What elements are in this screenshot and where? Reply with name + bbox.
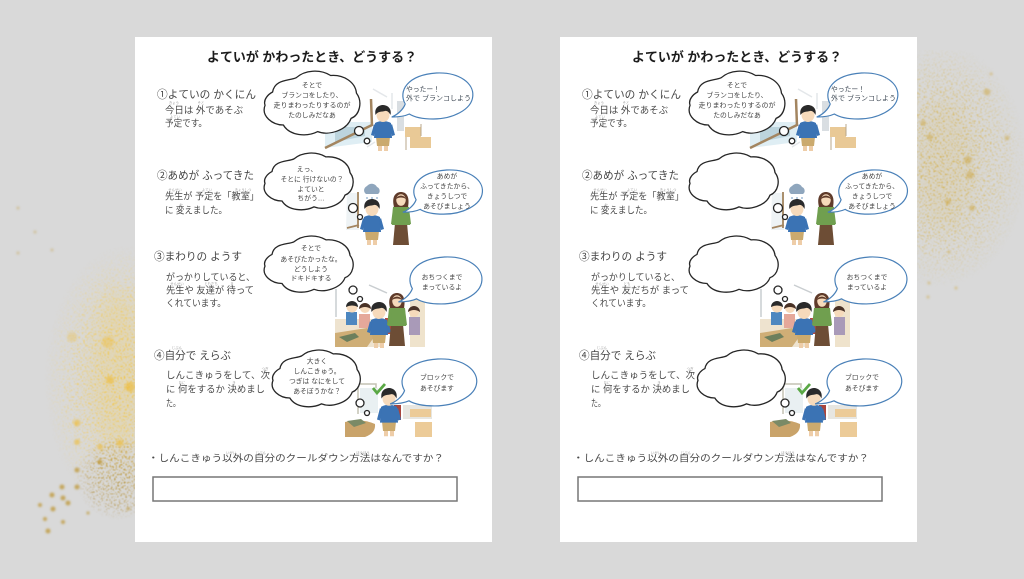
step 3 speech bubble: おちつくまで (847, 274, 888, 282)
step 2 speech bubble: あそびましょう (423, 202, 471, 210)
step 1 thought bubble (264, 71, 370, 144)
step 3 text: とも (624, 281, 630, 286)
step 2 text: せんせい (168, 187, 182, 192)
question: ほうほう (356, 450, 370, 455)
step 2 text: きょうしつ (660, 187, 677, 192)
step 2 text: ②あめが ふってきた (582, 168, 679, 182)
step 3 text: がっかりしていると、 (166, 272, 255, 284)
step 2 text: 先生が 予定を「教室」 (590, 190, 684, 202)
step 4 text: き (657, 380, 661, 385)
step 4 text: に 何をするか 決めまし (166, 384, 265, 396)
step 3 text: くれています。 (166, 298, 226, 310)
step 3 blank thought bubble (689, 236, 788, 302)
step 2 text: よてい (202, 187, 213, 192)
step 1 thought bubble: ブランコをしたり、 (282, 90, 342, 100)
step 2 text: きょうしつ (235, 187, 252, 192)
step 3 speech bubble: まっているよ (422, 284, 462, 292)
step 4 text (579, 345, 695, 410)
step 4 speech bubble (390, 359, 477, 406)
step 4 speech bubble: ブロックで (845, 372, 879, 382)
step 4 thought bubble: あそぼうかな？ (293, 388, 341, 396)
step 1 text: ①よていの かくにん (157, 88, 256, 101)
answer box (153, 477, 457, 501)
question: いがい (226, 450, 237, 455)
step 2 text (582, 168, 684, 216)
step 4 thought bubble: つぎは なにをして (289, 376, 345, 386)
step 3 text (154, 250, 255, 310)
step 2 blank thought bubble (689, 153, 788, 220)
step 4 speech bubble: あそびます (420, 384, 454, 392)
step 2 text: に 変えました。 (590, 204, 652, 216)
step 1 speech bubble (392, 73, 473, 119)
step 1 thought bubble (689, 71, 795, 144)
step 2 thought bubble: えっ、 (297, 166, 317, 174)
step 3 speech bubble: まっているよ (847, 284, 887, 292)
step 2 text: せんせい (593, 187, 607, 192)
page background (560, 37, 917, 542)
step 3 thought bubble: ドキドキする (291, 274, 331, 282)
step 1 speech bubble: やったー！ (406, 86, 440, 94)
step 2 speech bubble: あそびましょう (848, 202, 896, 210)
step 1 text: 今日は 外であそぶ (165, 104, 243, 116)
question: ・しんこきゅう以外の自分のクールダウン方法はなんですか？ (573, 452, 869, 464)
step 2 speech bubble: ふってきたから、 (845, 182, 899, 190)
step 2 speech bubble: あめが (862, 172, 882, 180)
step 1 illustration (750, 89, 856, 151)
step 3 thought bubble: あそびたかったな。 (280, 256, 342, 264)
step 3 text: 先生や 友達が 待って (166, 284, 254, 296)
step 3 text: 先生や 友だちが まって (591, 284, 689, 296)
step 1 text: そと (198, 100, 204, 105)
step 2 text: か (604, 202, 608, 207)
step 4 thought bubble: しんこきゅう。 (293, 368, 341, 376)
step 3 thought bubble (264, 236, 362, 302)
step 3 text: がっかりしていると、 (591, 272, 680, 284)
question: ・しんこきゅう以外の自分のクールダウン方法はなんですか？ (148, 452, 444, 464)
title: よていが かわったとき、どうする？ (632, 50, 842, 64)
step 1 text (582, 88, 681, 130)
step 2 thought bubble: ちがう… (297, 194, 325, 202)
step 3 illustration (760, 285, 850, 348)
question: いがい (651, 450, 662, 455)
step 3 text: ま (230, 281, 234, 286)
step 3 speech bubble (398, 257, 482, 304)
step 4 blank thought bubble (697, 350, 794, 416)
step 2 text: よてい (627, 187, 638, 192)
question (148, 450, 444, 464)
question (573, 450, 869, 464)
gold splatter: right (917, 50, 1024, 310)
step 1 text: ①よていの かくにん (582, 88, 681, 101)
step 4 text: た。 (591, 398, 605, 410)
step 4 speech bubble: ブロックで (420, 372, 454, 382)
step 3 speech bubble (823, 257, 907, 304)
question: じぶん (681, 450, 692, 455)
gold splatter: left (0, 200, 144, 550)
step 4 thought bubble: 大きく (307, 356, 327, 366)
step 2 text: か (179, 202, 183, 207)
step 4 text: ④自分で えらぶ (154, 349, 231, 362)
question: ほうほう (781, 450, 795, 455)
worksheet: right (blank thoughts) (560, 37, 917, 542)
step 4 text: き (232, 380, 236, 385)
step 4 speech bubble: あそびます (845, 384, 879, 392)
step 4 speech bubble (815, 359, 902, 406)
step 4 text: しんこきゅうをして、次 (591, 370, 695, 382)
step 3 illustration (335, 285, 425, 348)
step 1 text: 予定です。 (165, 118, 207, 130)
step 1 text: 今日は 外であそぶ (590, 104, 668, 116)
step 1 thought bubble: そとで (302, 82, 322, 90)
step 2 thought bubble (264, 153, 362, 220)
step 4 text: つぎ (262, 366, 269, 371)
step 4 thought bubble (272, 350, 370, 416)
step 1 text: きょう (169, 100, 179, 105)
step 1 text: 予定です。 (590, 118, 632, 130)
step 4 text: なに (179, 380, 186, 385)
step 2 speech bubble: あめが (437, 172, 457, 180)
step 3 speech bubble: おちつくまで (422, 274, 463, 282)
step 2 text: ②あめが ふってきた (157, 168, 254, 182)
step 3 text (579, 250, 689, 310)
step 2 speech bubble (403, 170, 482, 214)
step 1 thought bubble: たのしみだなあ (713, 112, 761, 120)
step 2 speech bubble: きょうしつで (427, 192, 467, 200)
step 1 speech bubble: やったー！ (831, 86, 865, 94)
step 4 text: じぶん (172, 345, 183, 350)
step 2 text: に 変えました。 (165, 204, 227, 216)
step 2 illustration (771, 184, 836, 245)
step 2 thought bubble: そとに 行けないの？ (280, 174, 344, 184)
step 1 thought bubble: そとで (727, 82, 747, 90)
step 4 illustration (770, 384, 857, 437)
step 3 text: ともだち (204, 281, 218, 286)
step 2 thought bubble: よていと (297, 186, 325, 194)
step 4 text: た。 (166, 398, 180, 410)
step 4 text: ④自分で えらぶ (579, 349, 656, 362)
step 1 speech bubble: 外で ブランコしよう (831, 94, 896, 102)
step 1 text (157, 88, 256, 130)
answer box (578, 477, 882, 501)
step 2 text (157, 168, 259, 216)
step 1 speech bubble: 外で ブランコしよう (406, 94, 471, 102)
step 4 text: じぶん (597, 345, 608, 350)
worksheet: left (with example thoughts) (135, 37, 492, 542)
step 1 speech bubble (817, 73, 898, 119)
step 1 text: よてい (170, 114, 181, 119)
step 4 text: つぎ (687, 366, 694, 371)
step 3 text: くれています。 (591, 298, 651, 310)
step 2 speech bubble (828, 170, 907, 214)
step 3 text: せんせい (170, 281, 184, 286)
step 4 text: しんこきゅうをして、次 (166, 370, 270, 382)
step 3 text: せんせい (595, 281, 609, 286)
step 3 text: ③まわりの ようす (154, 250, 242, 263)
step 4 text: に 何をするか 決めまし (591, 384, 690, 396)
title: よていが かわったとき、どうする？ (207, 50, 417, 64)
step 1 thought bubble: 走りまわったりするのが (698, 100, 776, 110)
step 1 thought bubble: ブランコをしたり、 (707, 90, 767, 100)
page background (135, 37, 492, 542)
step 2 speech bubble: ふってきたから、 (420, 182, 474, 190)
step 2 speech bubble: きょうしつで (852, 192, 892, 200)
step 2 text: 先生が 予定を「教室」 (165, 190, 259, 202)
step 1 thought bubble: 走りまわったりするのが (274, 100, 351, 110)
step 1 text: きょう (594, 100, 604, 105)
question: じぶん (256, 450, 267, 455)
step 1 illustration (325, 89, 431, 151)
step 3 thought bubble: そとで (301, 244, 321, 252)
step 3 thought bubble: どうしよう (294, 266, 328, 274)
step 4 illustration (345, 384, 432, 437)
step 1 text: そと (623, 100, 629, 105)
step 1 text: よてい (595, 114, 606, 119)
step 4 text: なに (604, 380, 611, 385)
step 4 text (154, 345, 270, 410)
step 3 text: ③まわりの ようす (579, 250, 667, 263)
step 1 thought bubble: たのしみだなあ (288, 112, 336, 120)
step 2 illustration (346, 184, 411, 245)
